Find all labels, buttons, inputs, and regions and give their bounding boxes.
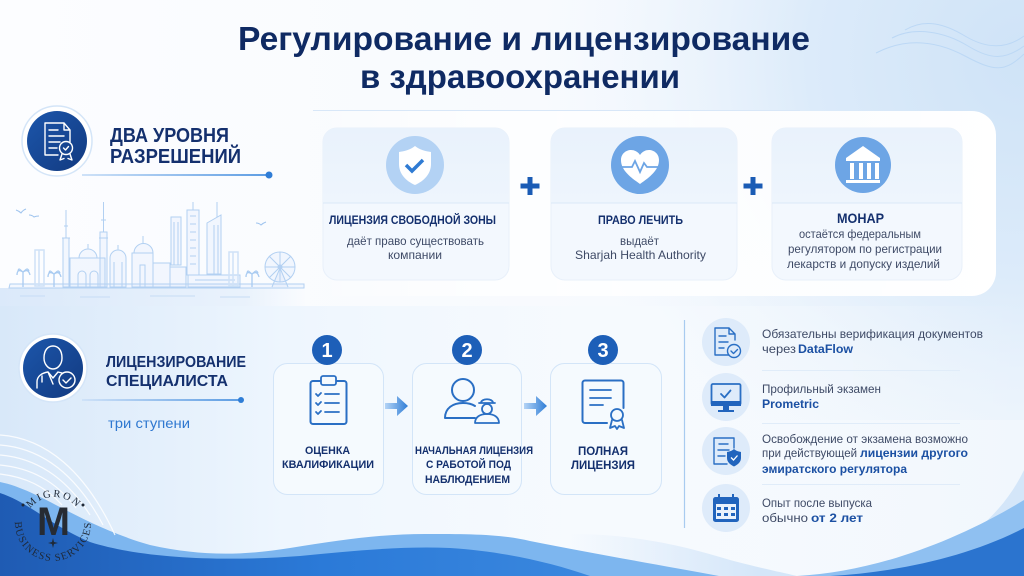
decorative wave lines xyxy=(876,23,1024,68)
title: Регулирование и лицензирование xyxy=(238,20,810,57)
icon: supervised person xyxy=(445,379,499,423)
panel: right to treat xyxy=(551,128,737,280)
item: exemption xyxy=(702,427,968,476)
panel: free zone license: ЛИЦЕНЗИЯ СВОБОДНОЙ ЗОНЫ xyxy=(329,212,496,227)
panel: MOHAP: лекарств и допуску изделий xyxy=(787,257,940,271)
step 3: ЛИЦЕНЗИЯ xyxy=(571,460,635,472)
icon: plus xyxy=(520,177,540,195)
step 2: НАБЛЮДЕНИЕМ xyxy=(425,474,510,486)
panel: MOHAP xyxy=(772,128,962,280)
icon: heart pulse xyxy=(611,136,669,194)
icon: calendar xyxy=(702,484,750,532)
item: experience: от 2 лет xyxy=(811,511,863,525)
item: DataFlow: Обязательны верификация документов xyxy=(762,327,983,341)
icon: document shield xyxy=(702,427,750,475)
badge: 2 xyxy=(452,335,482,365)
panel: MOHAP: регулятором по регистрации xyxy=(788,242,942,256)
arrow xyxy=(524,396,547,416)
section header: two permit levels: РАЗРЕШЕНИЙ xyxy=(110,144,241,168)
logo: Migron Business Services: BUSINESS SERVICES xyxy=(14,522,91,561)
badge: 1 xyxy=(312,335,342,365)
icon: document check xyxy=(702,318,750,366)
panel: free zone license: даёт право существовать xyxy=(347,234,484,248)
step 1: КВАЛИФИКАЦИИ xyxy=(282,459,374,471)
icon: clipboard xyxy=(310,376,346,424)
section header: two permit levels xyxy=(22,106,272,178)
badge: 2: 2 xyxy=(461,340,473,362)
icon: monitor xyxy=(702,373,750,421)
panel: upper white container xyxy=(313,111,996,296)
badge: 3: 3 xyxy=(597,340,609,362)
title xyxy=(238,20,810,95)
badge: 3 xyxy=(588,335,618,365)
section header: specialist licensing xyxy=(19,334,246,431)
step 3: ПОЛНАЯ xyxy=(578,446,628,458)
bottom waves xyxy=(0,435,1024,576)
item: exemption: эмиратского регулятора xyxy=(762,462,907,476)
panel: MOHAP: МОНАР xyxy=(837,210,884,226)
skyline illustration xyxy=(0,202,305,306)
step 1 xyxy=(274,335,384,494)
item: Prometric: Prometric xyxy=(762,397,819,411)
icon: certificate xyxy=(582,380,624,429)
logo: Migron Business Services: M xyxy=(37,500,70,544)
item: DataFlow xyxy=(702,318,983,366)
item: Prometric xyxy=(702,373,881,421)
title: в здравоохранении xyxy=(360,58,680,95)
panel: right to treat: выдаёт xyxy=(620,234,659,248)
icon: shield xyxy=(386,136,444,194)
requirements column xyxy=(684,318,983,532)
section header: specialist licensing: три ступени xyxy=(108,415,190,431)
step 2 xyxy=(412,335,533,494)
panel: right to treat: Sharjah Health Authority xyxy=(575,248,706,262)
section header: specialist licensing: СПЕЦИАЛИСТА xyxy=(106,373,228,390)
item: exemption: лицензии другого xyxy=(860,446,968,460)
item: experience: обычно xyxy=(762,511,808,525)
step 3 xyxy=(550,335,662,494)
item: experience: Опыт после выпуска xyxy=(762,496,872,510)
step 2: С РАБОТОЙ ПОД xyxy=(426,458,511,471)
item: exemption: Освобождение от экзамена возможно xyxy=(762,432,968,446)
badge: 1: 1 xyxy=(321,340,333,362)
item: DataFlow: через xyxy=(762,342,797,356)
icon: government building xyxy=(835,137,891,193)
item: Prometric: Профильный экзамен xyxy=(762,382,881,396)
section header: specialist licensing: ЛИЦЕНЗИРОВАНИЕ xyxy=(106,354,246,371)
panel: free zone license: компании xyxy=(388,248,442,262)
icon: permit document xyxy=(22,106,92,176)
icon: plus xyxy=(744,177,762,195)
panel: right to treat: ПРАВО ЛЕЧИТЬ xyxy=(598,213,683,227)
logo: Migron Business Services xyxy=(14,490,91,561)
panel: MOHAP: остаётся федеральным xyxy=(799,227,921,241)
item: exemption: при действующей xyxy=(762,446,857,460)
item: DataFlow: DataFlow xyxy=(798,342,854,356)
icon: doctor xyxy=(19,334,87,402)
step 1: ОЦЕНКА xyxy=(305,445,350,457)
step 2: НАЧАЛЬНАЯ ЛИЦЕНЗИЯ xyxy=(415,445,533,457)
section header: two permit levels: ДВА УРОВНЯ xyxy=(110,125,229,147)
item: experience xyxy=(702,484,872,532)
panel: free zone license xyxy=(323,128,509,280)
logo: Migron Business Services: MIGRON xyxy=(26,490,81,508)
arrow xyxy=(385,396,408,416)
